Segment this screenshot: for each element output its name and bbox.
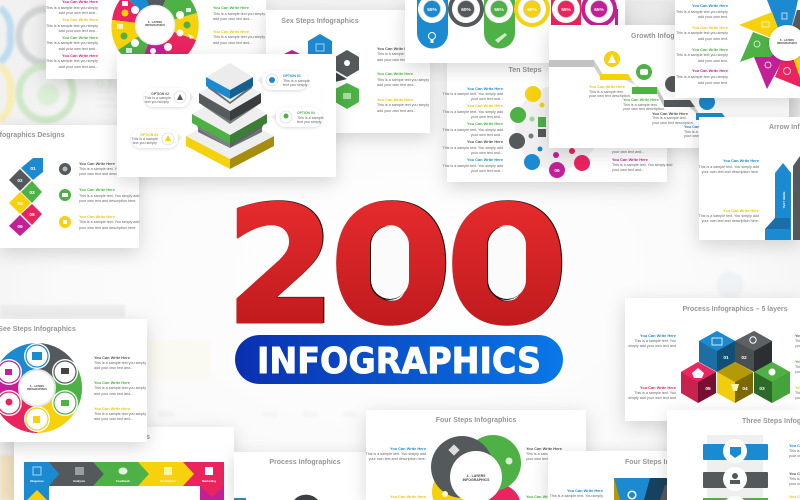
- star burst: 6 - LAYERS: [780, 38, 794, 42]
- labels: You Can Write Here: [79, 187, 116, 192]
- overlapping circles: 4 - LAYERS: [467, 474, 486, 478]
- labels: This is a sample text. You: [634, 391, 676, 395]
- right labels: your own text and...: [612, 168, 644, 172]
- ghosted background graphics: 55%: [158, 410, 174, 419]
- puzzle wheel: INFOGRAPHICS: [145, 23, 165, 27]
- chevron row: Analysis: [73, 479, 85, 483]
- step labels: your own text description.: [652, 121, 694, 125]
- labels: your own text and description here.: [79, 199, 136, 203]
- labels: simply add your own text and: [628, 396, 676, 400]
- step labels: your own text description.: [623, 107, 665, 111]
- labels: You Can Write Here: [723, 208, 760, 213]
- right labels: You Can Write Here: [612, 157, 649, 162]
- labels: This is a sample text you simply: [377, 52, 429, 56]
- labels: You Can Write Here: [526, 494, 563, 499]
- folded shapes: [614, 478, 667, 500]
- left labels: This is a sample text. You simply add: [443, 146, 503, 150]
- left labels: This is a sample text. You simply add: [443, 92, 503, 96]
- panel: four steps blue slide: [548, 451, 767, 500]
- cube stack: 01: [723, 355, 729, 361]
- puzzle wheel: [111, 0, 199, 69]
- right labels: This is a sample text. You simply add: [612, 163, 672, 167]
- heading: Process Infographics – 5 layers: [682, 306, 788, 313]
- numbered diamond arrows: 01: [30, 166, 36, 172]
- panel: star fan slide: [675, 0, 800, 98]
- cube stack: 02: [741, 355, 747, 361]
- labels: This is a sample text. You simply add: [79, 167, 139, 171]
- left labels: your own text and...: [471, 97, 503, 101]
- labels: your own text desc.: [526, 457, 558, 461]
- labels: [79, 161, 139, 230]
- labels: You Can Write Here: [94, 355, 131, 360]
- left labels: You Can Write Here: [467, 103, 504, 108]
- left labels: add your own text and...: [59, 65, 98, 69]
- radial wheel: 06: [554, 168, 560, 174]
- chevron row: Marketing: [202, 479, 216, 483]
- left labels: This is a sample text. You simply add: [443, 128, 503, 132]
- left labels: your own text and...: [471, 133, 503, 137]
- radial wheel: [509, 86, 599, 178]
- panel: six steps circle slide: [0, 319, 147, 442]
- labels: You Can Write Here: [94, 380, 131, 385]
- badge: INFOGRAPHICS pill: INFOGRAPHICS: [257, 341, 541, 382]
- left labels: You Can Write Here: [467, 157, 504, 162]
- labels: You Can Write Here: [377, 97, 414, 102]
- panel: venn four steps slide: [366, 410, 586, 500]
- panel: six hexagon steps slide: [266, 10, 430, 133]
- panel: process infographics slide: [234, 452, 384, 500]
- percentage shapes: 60%: [527, 7, 538, 13]
- labels: add your own text and...: [94, 392, 133, 396]
- chevron row: Diagnose: [30, 479, 44, 483]
- labels: [94, 355, 146, 421]
- labels: You Can Write Here: [692, 68, 729, 73]
- option callout 03: This is a sample: [131, 137, 158, 141]
- circular process: [0, 343, 82, 433]
- option callout 04: This is a sample: [297, 116, 324, 120]
- zero counters: [370, 226, 526, 300]
- labels: This is a sample text. You simply add: [699, 165, 759, 169]
- heading: Four Steps Infographics: [625, 459, 706, 466]
- right labels: This is a sample text you simply: [213, 35, 265, 39]
- labels: This is a sample text. You simply: [550, 494, 603, 498]
- labels: You Can Write Here: [526, 446, 563, 451]
- left labels: You Can Write Here: [62, 17, 99, 22]
- heading: Ten Steps: [509, 67, 542, 74]
- headline: 200: 2: [226, 172, 335, 360]
- labels: your own text and description here.: [79, 172, 136, 176]
- left labels: This is a sample text you simply: [46, 6, 98, 10]
- right labels: [612, 150, 672, 172]
- panel: layered pyramid slide: [117, 54, 336, 177]
- option callout 04: [271, 107, 324, 127]
- cube stack: 03: [759, 386, 765, 392]
- isometric pyramid: [186, 63, 274, 169]
- black offset outline: 0: [447, 172, 568, 359]
- star burst: [739, 0, 800, 89]
- right labels: You Can Write Here: [213, 29, 250, 34]
- labels: You Can Write Here: [390, 494, 427, 499]
- left labels: You Can Write Here: [467, 139, 504, 144]
- left labels: your own text and...: [471, 169, 503, 173]
- heading: Four Steps Infographics: [436, 417, 516, 424]
- cube stack: [681, 331, 790, 403]
- left labels: add your own text and...: [59, 47, 98, 51]
- option callout 02: This is a sample: [144, 96, 171, 100]
- labels: your own text and description here.: [702, 170, 759, 174]
- labels: You Can Write Here: [692, 25, 729, 30]
- labels: This is a sample text. You simply add: [699, 214, 759, 218]
- right labels: add your own text and...: [213, 41, 252, 45]
- left labels: This is a sample text you simply: [46, 41, 98, 45]
- right labels: your own text and...: [612, 150, 644, 154]
- headline: 200: 0: [330, 172, 451, 360]
- ghosted background graphics: You Can: [96, 89, 111, 94]
- ghosted background graphics: complete and: [96, 103, 120, 108]
- circular process: INFOGRAPHICS: [27, 387, 47, 391]
- step labels: [589, 84, 726, 138]
- black offset outline: 0: [331, 172, 452, 359]
- labels: your own text and description here.: [369, 457, 426, 461]
- labels: add your own text and...: [377, 109, 416, 113]
- circular process: 6 - LAYERS: [30, 384, 44, 388]
- numbered diamond arrows: 06: [17, 224, 23, 230]
- labels: This is a sample text you simply: [676, 10, 728, 14]
- numbered diamond arrows: 05: [29, 212, 35, 218]
- frame sides: [24, 486, 224, 500]
- right labels: [213, 5, 265, 45]
- step labels: your own text description.: [684, 134, 726, 138]
- step labels: This is a sample text.: [623, 103, 658, 107]
- labels: This is a sample text. You: [634, 339, 676, 343]
- staircase: [549, 51, 767, 133]
- option callout 01: OPTION 01: [283, 74, 301, 78]
- heading: Process Infographics: [269, 459, 341, 466]
- left labels: This is a sample text. You simply add: [443, 110, 503, 114]
- overlapping circles: INFOGRAPHICS: [463, 478, 490, 482]
- headline: 200: [226, 172, 568, 360]
- heading: Growth Infographics: [631, 33, 700, 40]
- left labels: your own text and...: [471, 115, 503, 119]
- labels: This is a sample text you simply: [377, 78, 429, 82]
- black offset outline: [227, 172, 568, 359]
- panel: process 5 layers slide: [625, 298, 800, 421]
- option callout 03: OPTION 03: [140, 133, 158, 137]
- labels: add your own text and...: [94, 366, 133, 370]
- option callout 02: text you simply: [145, 100, 169, 104]
- right labels: add your own text and...: [213, 17, 252, 21]
- option callout 03: [131, 129, 182, 148]
- labels: You Can Write Here: [640, 385, 677, 390]
- left labels: [443, 86, 504, 173]
- labels: This is a sample text you simply: [94, 412, 146, 416]
- option callout 01: This is a sample: [283, 79, 310, 83]
- step labels: This is a sample text.: [652, 116, 687, 120]
- numbered diamond arrows: 02: [17, 178, 23, 184]
- ghosted background graphics: It is a long: [96, 96, 114, 101]
- labels: [789, 443, 800, 499]
- labels: [628, 333, 800, 400]
- labels: This is a sample text you simply: [94, 386, 146, 390]
- labels: You Can Write Here: [567, 488, 604, 493]
- option callout 04: OPTION 04: [297, 111, 315, 115]
- chevron row: Evaluation: [160, 479, 176, 483]
- icons: [428, 32, 507, 43]
- numbered diamond arrows: 03: [29, 190, 35, 196]
- ghosted background graphics: 03.: [96, 75, 117, 92]
- labels: This is a sample text.: [526, 452, 561, 456]
- left labels: This is a sample text you simply: [46, 59, 98, 63]
- labels: You Can Write Here: [640, 333, 677, 338]
- labels: add your own text and...: [94, 417, 133, 421]
- percentage shapes: 55%: [494, 7, 505, 13]
- labels: This is a sample text. You simply add: [79, 194, 139, 198]
- labels: This is a sample text. You simply add: [79, 220, 139, 224]
- right labels: This is a sample text you simply: [213, 12, 265, 16]
- labels: [676, 3, 729, 85]
- chevron row: Feedback: [116, 479, 130, 483]
- labels: You Can Write Here: [94, 406, 131, 411]
- labels: This is a sample text you simply: [676, 53, 728, 57]
- percentage shapes: [417, 0, 618, 48]
- cube stack: 05: [705, 386, 711, 392]
- option callout 02: OPTION 02: [151, 92, 169, 96]
- panel: arrow infographic slide: [699, 117, 800, 240]
- overlapping circles: [431, 435, 521, 500]
- labels: simply add your own text and: [628, 344, 676, 348]
- labels: This is a sample text. You simply add: [366, 452, 426, 456]
- black offset outline: 2: [227, 172, 336, 359]
- step labels: This is a sample text.: [684, 130, 719, 134]
- labels: You Can Write Here: [79, 161, 116, 166]
- labels: add your own text.: [698, 59, 728, 63]
- chevron row: [24, 462, 224, 486]
- step labels: You Can Write Here: [652, 111, 689, 116]
- ghosted background graphics: 55%: [263, 412, 278, 419]
- panel: three steps slide: [667, 410, 800, 500]
- labels: You Can Write Here: [723, 158, 760, 163]
- banded steps: [703, 435, 768, 500]
- left labels: add your own text and...: [59, 11, 98, 15]
- percentage shapes: 55%: [427, 7, 438, 13]
- labels: [377, 46, 429, 113]
- panel: arrow infographics designs slide: [0, 125, 139, 248]
- option callout 03: text you simply: [133, 141, 157, 145]
- option callout 04: text you simply: [297, 120, 322, 124]
- heading: See Steps Infographics: [0, 326, 76, 333]
- labels: You Can Write Here: [377, 71, 414, 76]
- labels: add your own text and...: [377, 83, 416, 87]
- left labels: add your own text and...: [59, 29, 98, 33]
- hexagons: [282, 34, 359, 109]
- step labels: You Can Write Here: [623, 97, 660, 102]
- percentage shapes: 60%: [461, 7, 472, 13]
- labels: You Can Write Here: [390, 446, 427, 451]
- ghosted background graphics: 55%: [343, 412, 358, 419]
- panel: puzzle wheel slide: [46, 0, 266, 79]
- heading: Sex Steps Infographics: [281, 18, 359, 25]
- labels: You Can Write Here: [692, 47, 729, 52]
- labels: This is a sample text you simply: [94, 361, 146, 365]
- labels: You Can Write Here: [79, 214, 116, 219]
- option callout 01: [257, 71, 310, 90]
- panel: growth staircase slide: [549, 25, 789, 148]
- labels: add your own text.: [698, 81, 728, 85]
- icon badges: [59, 163, 71, 228]
- percentage shapes: 65%: [594, 7, 605, 13]
- labels: This is a sample text you simply: [676, 31, 728, 35]
- option callout 01: text you simply: [283, 83, 308, 87]
- cube stack: 04: [742, 386, 748, 392]
- labels: This is a sample text you simply: [676, 75, 728, 79]
- diagram tops: [234, 495, 318, 500]
- labels: add your own text.: [698, 15, 728, 19]
- headline: 200: 0: [446, 172, 567, 360]
- panel: percentage slide: [405, 0, 625, 63]
- heading: Three Steps Infog: [742, 418, 800, 425]
- labels: your own text and description here.: [702, 219, 759, 223]
- labels: your own text and description here.: [79, 226, 136, 230]
- labels: add your own text.: [698, 37, 728, 41]
- labels: This is a sample text you simply: [377, 103, 429, 107]
- option callout 02: [144, 88, 194, 107]
- labels: [550, 488, 604, 498]
- labels: You Can Write Here: [377, 46, 414, 51]
- left labels: your own text and...: [471, 151, 503, 155]
- labels: You Can Write Here: [692, 3, 729, 8]
- puzzle wheel: 6 - LAYERS: [148, 20, 162, 24]
- star burst: INFOGRAPHICS: [777, 41, 797, 45]
- numbered diamond arrows: [9, 158, 43, 236]
- left labels: You Can Write Here: [62, 35, 99, 40]
- left labels: [46, 0, 99, 69]
- left labels: You Can Write Here: [62, 53, 99, 58]
- step labels: You Can Write Here: [684, 124, 721, 129]
- panel: ten steps slide: [443, 55, 672, 182]
- right labels: You Can Write Here: [213, 5, 250, 10]
- numbered diamond arrows: 04: [17, 201, 23, 207]
- left labels: This is a sample text. You simply add: [443, 164, 503, 168]
- heading: Steps Infographics: [87, 434, 150, 441]
- ghosted background graphics: 55%: [303, 412, 318, 419]
- left labels: This is a sample text you simply: [46, 24, 98, 28]
- panel: chevron process slide: [14, 427, 234, 500]
- step labels: This is a sample text.: [589, 90, 624, 94]
- labels: [699, 158, 760, 223]
- labels: add your own text and...: [377, 58, 416, 62]
- step labels: You Can Write Here: [589, 84, 626, 89]
- percentage shapes: 55%: [561, 7, 572, 13]
- left labels: You Can Write Here: [467, 86, 504, 91]
- left labels: You Can Write Here: [467, 121, 504, 126]
- step labels: your own text description.: [589, 94, 631, 98]
- upward arrows: TEXT HERE: [782, 192, 786, 208]
- labels: [366, 446, 563, 499]
